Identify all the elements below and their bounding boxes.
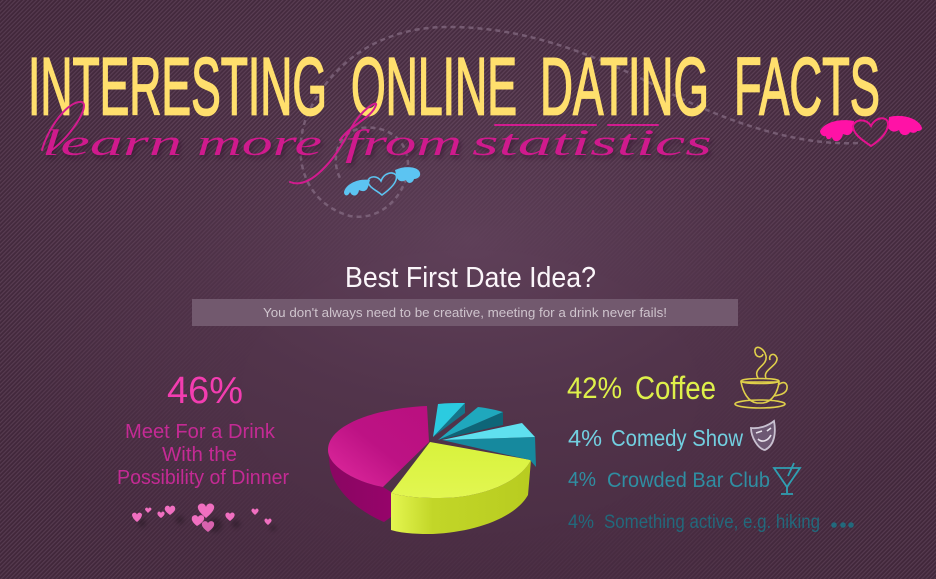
subtitle: learn more from statistics: from bbox=[345, 123, 462, 164]
icon: coffee cup bbox=[735, 347, 787, 408]
icon: pink winged heart bbox=[820, 116, 922, 146]
subheading bar: You don't always need to be creative, meeting for a drink never fails! bbox=[263, 305, 667, 320]
callout: 46 percent: With the bbox=[162, 444, 237, 466]
dashed flight path bbox=[300, 27, 858, 217]
subtitle: learn more from statistics: more bbox=[199, 126, 324, 167]
legend: coffee: 42% bbox=[567, 372, 622, 405]
icon: dots bbox=[831, 522, 854, 528]
subtitle: learn more from statistics: from bbox=[347, 126, 464, 167]
icon: martini glass bbox=[774, 463, 800, 494]
pie slice: cyan 4 percent bbox=[433, 403, 465, 437]
callout: 46 percent: Possibility of Dinner bbox=[117, 467, 289, 489]
heading: Best First Date Idea: Best First Date Idea? bbox=[345, 262, 596, 294]
legend: crowded bar club: Crowded Bar Club bbox=[607, 469, 770, 492]
legend: crowded bar club: 4% bbox=[568, 469, 596, 491]
subtitle: learn more from statistics: learn bbox=[42, 123, 182, 164]
title: ONLINE bbox=[351, 42, 517, 132]
legend: something active: Something active, e.g. hiking bbox=[604, 512, 820, 533]
subtitle: learn more from statistics bbox=[42, 102, 714, 183]
swashes bbox=[42, 102, 658, 183]
title bbox=[28, 42, 880, 132]
callout: 46 percent bbox=[117, 370, 289, 489]
pie slice: yellow 42 percent bbox=[391, 442, 531, 534]
legend: coffee bbox=[567, 347, 787, 408]
subheading bar bbox=[192, 299, 738, 326]
callout: 46 percent: Meet For a Drink bbox=[125, 421, 276, 443]
subtitle: learn more from statistics: statistics bbox=[474, 126, 714, 167]
pie chart bbox=[328, 403, 536, 534]
legend: something active: 4% bbox=[568, 512, 594, 533]
subtitle: learn more from statistics: more bbox=[197, 123, 322, 164]
legend: comedy show: Comedy Show bbox=[611, 425, 743, 451]
title: DATING bbox=[540, 42, 709, 132]
legend: comedy show: 4% bbox=[568, 425, 602, 451]
legend: crowded bar club bbox=[568, 463, 800, 494]
subtitle: learn more from statistics: learn bbox=[44, 126, 184, 167]
callout: 46 percent: 46% bbox=[167, 370, 243, 412]
pie slice: light blue 4 percent bbox=[442, 423, 536, 467]
legend: coffee: Coffee bbox=[635, 370, 716, 406]
icon: comedy mask bbox=[751, 421, 775, 450]
subtitle: learn more from statistics: statistics bbox=[472, 123, 712, 164]
title: INTERESTING bbox=[28, 42, 327, 132]
icon: blue winged heart bbox=[344, 167, 420, 196]
pie slice: teal 4 percent bbox=[438, 407, 503, 440]
legend: comedy show bbox=[568, 421, 775, 451]
icon: hearts bbox=[132, 503, 276, 532]
pie slice: magenta 46 percent bbox=[328, 406, 429, 522]
